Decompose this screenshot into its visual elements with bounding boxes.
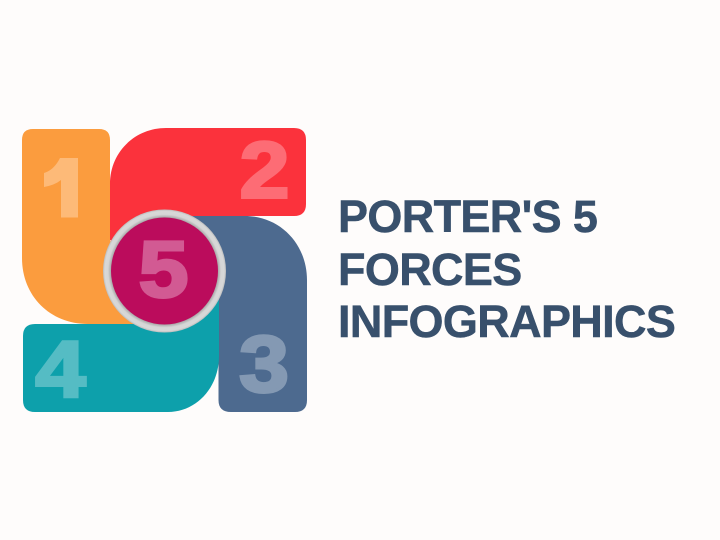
- title: INFOGRAPHICS: [338, 296, 675, 347]
- digit 3: 3: [239, 319, 289, 408]
- digit 5: 5: [139, 224, 188, 313]
- title: [338, 191, 675, 347]
- panel 4: teal: [23, 290, 219, 414]
- panel 2: red: [110, 125, 306, 260]
- title: FORCES: [338, 244, 522, 295]
- digit 4: 4: [35, 325, 86, 414]
- digit 1: [44, 158, 78, 218]
- infographic graphic: [22, 128, 307, 412]
- digit 1: 1: [41, 144, 96, 234]
- digit 2: 2: [240, 125, 289, 214]
- panel 1: orange: [22, 129, 134, 324]
- panel 3: blue: [170, 216, 307, 412]
- title: PORTER'S 5: [338, 191, 597, 242]
- circle 5: [103, 210, 226, 332]
